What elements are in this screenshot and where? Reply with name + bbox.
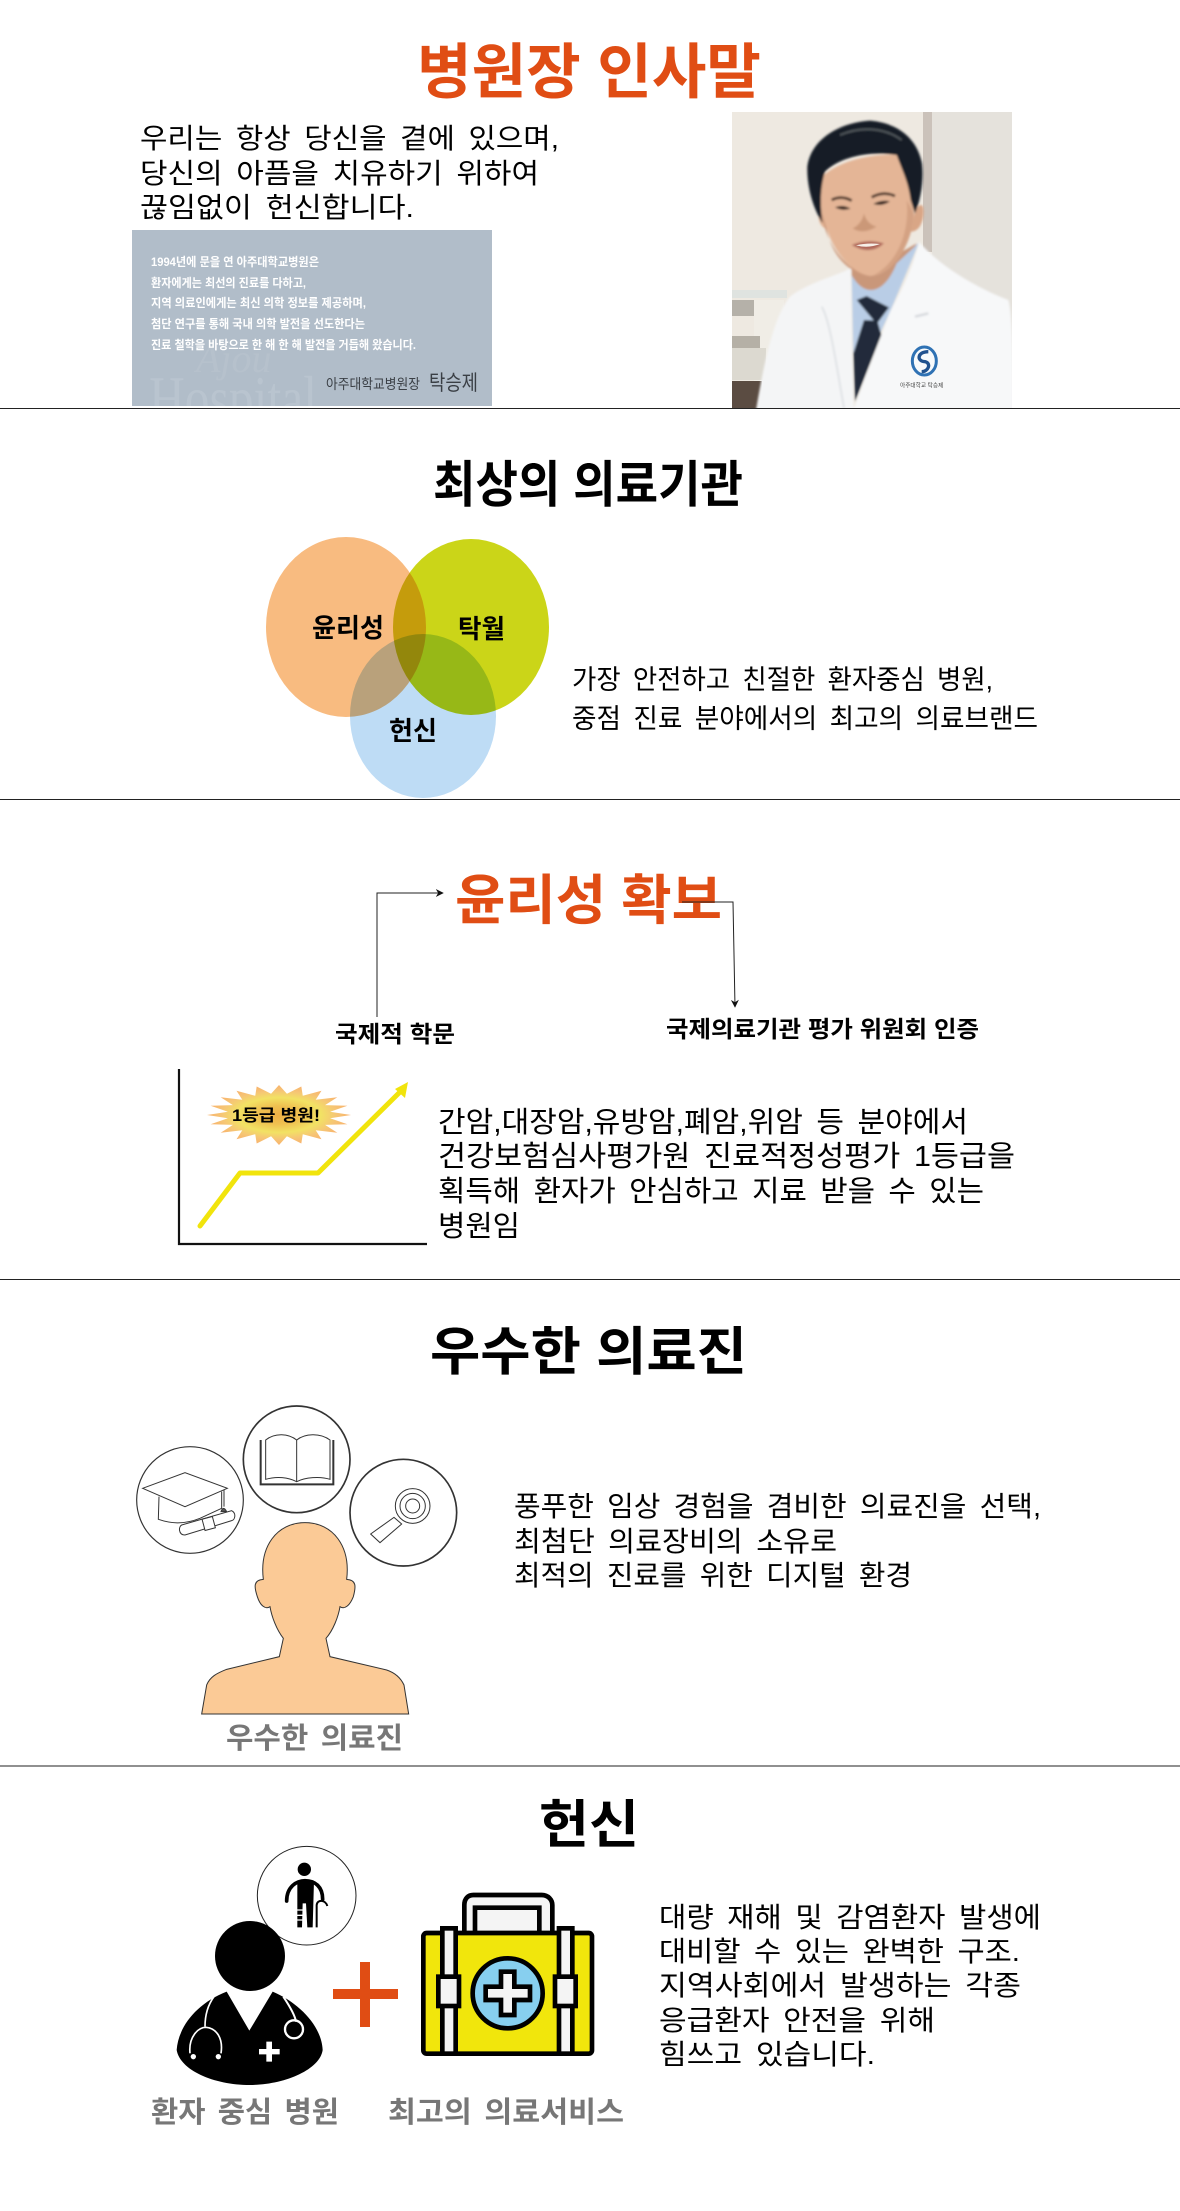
description text: 지역사회에서 발생하는 각종 <box>659 1970 1021 2001</box>
panel: message card: 1994년에 문을 연 아주대학교병원은 <box>151 254 319 269</box>
venn diagram: 헌신 <box>389 716 437 746</box>
description text: 대비할 수 있는 완벽한 구조. <box>659 1936 1020 1967</box>
panel: message card: 탁승제 <box>429 372 478 395</box>
panel: message card: Hospital <box>149 363 317 434</box>
label: patient-centered hospital: 환자 중심 병원 <box>151 2096 339 2129</box>
label: international academics: 국제적 학문 <box>335 1021 455 1047</box>
photo: hospital director portrait <box>732 112 1013 410</box>
greeting text block: 우리는 항상 당신을 곁에 있으며, <box>140 123 559 154</box>
icon: plus sign <box>333 1962 398 2027</box>
title: 병원장 인사말 <box>417 39 761 106</box>
panel: message card: 지역 의료인에게는 최신 의학 정보를 제공하며, <box>151 295 366 310</box>
line chart <box>179 1069 427 1244</box>
panel: message card <box>132 230 492 406</box>
icon: first aid kit <box>423 1895 592 2054</box>
description text: 최첨단 의료장비의 소유로 <box>514 1526 837 1557</box>
greeting text block <box>140 123 559 223</box>
panel: message card: 진료 철학을 바탕으로 한 해 한 해 발전을 거듭해 왔습니다. <box>151 337 416 352</box>
description text: 간암,대장암,유방암,폐암,위암 등 분야에서 <box>438 1106 968 1139</box>
description text: 풍푸한 임상 경험을 겸비한 의료진을 선택, <box>514 1491 1041 1522</box>
description text <box>659 1902 1041 2070</box>
heading: 윤리성 확보 <box>455 871 722 931</box>
description text: 대량 재해 및 감염환자 발생에 <box>659 1902 1041 1933</box>
description text: 힘쓰고 있습니다. <box>659 2039 875 2070</box>
arrow: academics to ethics <box>377 893 443 1017</box>
description text: 응급환자 안전을 위해 <box>659 2005 935 2036</box>
arrow: ethics to accreditation <box>682 902 735 1007</box>
section: dedication <box>151 1797 1041 2129</box>
description text: 획득해 환자가 안심하고 지료 받을 수 있는 <box>438 1175 984 1208</box>
description text: 건강보험심사평가원 진료적정성평가 1등급을 <box>438 1141 1015 1173</box>
section: excellent medical staff <box>137 1324 1041 1755</box>
description text <box>572 665 1038 734</box>
divider <box>0 1765 1180 1767</box>
badge: top grade hospital: 1등급 병원! <box>232 1106 320 1125</box>
description text: 가장 안전하고 친절한 환자중심 병원, <box>572 665 993 695</box>
panel: message card: 환자에게는 최선의 진료를 다하고, <box>151 275 306 290</box>
section: best medical institution <box>266 457 1038 798</box>
icon: magnifier <box>350 1459 457 1566</box>
illustration: doctor silhouette with icons <box>137 1406 457 1714</box>
label: best medical service: 최고의 의료서비스 <box>388 2096 624 2129</box>
venn diagram <box>266 537 549 798</box>
panel: message card: 아주대학교병원장 <box>326 376 420 392</box>
venn diagram: 윤리성 <box>312 613 384 643</box>
icon: open book <box>243 1406 350 1513</box>
description text <box>514 1491 1041 1591</box>
panel: message card: Ajou <box>193 336 272 381</box>
badge: top grade hospital <box>207 1085 351 1145</box>
photo: hospital director portrait: 아주대학교 탁승제 <box>900 381 943 389</box>
venn diagram: 탁월 <box>458 614 505 644</box>
divider <box>0 408 1180 410</box>
label: excellent staff: 우수한 의료진 <box>226 1722 403 1755</box>
icon: graduation cap <box>137 1447 243 1553</box>
heading: 우수한 의료진 <box>430 1324 747 1382</box>
description text: 최적의 진료를 위한 디지털 환경 <box>514 1560 912 1591</box>
heading: 헌신 <box>539 1797 639 1855</box>
heading: 최상의 의료기관 <box>433 457 743 513</box>
icon: doctor with patient bubble <box>177 1846 356 2085</box>
description text <box>438 1106 1015 1243</box>
divider <box>0 1278 1180 1280</box>
label: accreditation: 국제의료기관 평가 위원회 인증 <box>666 1016 979 1042</box>
description text: 병원임 <box>438 1211 520 1243</box>
section: hospital director greeting <box>132 39 1013 434</box>
divider <box>0 798 1180 800</box>
greeting text block: 당신의 아픔을 치유하기 위하여 <box>140 158 539 189</box>
panel: message card: 첨단 연구를 통해 국내 의학 발전을 선도한다는 <box>151 316 365 331</box>
icon: head and shoulders <box>202 1523 409 1714</box>
description text: 중점 진료 분야에서의 최고의 의료브랜드 <box>572 704 1038 734</box>
greeting text block: 끊임없이 헌신합니다. <box>140 192 414 223</box>
section: securing ethics <box>179 871 1015 1244</box>
